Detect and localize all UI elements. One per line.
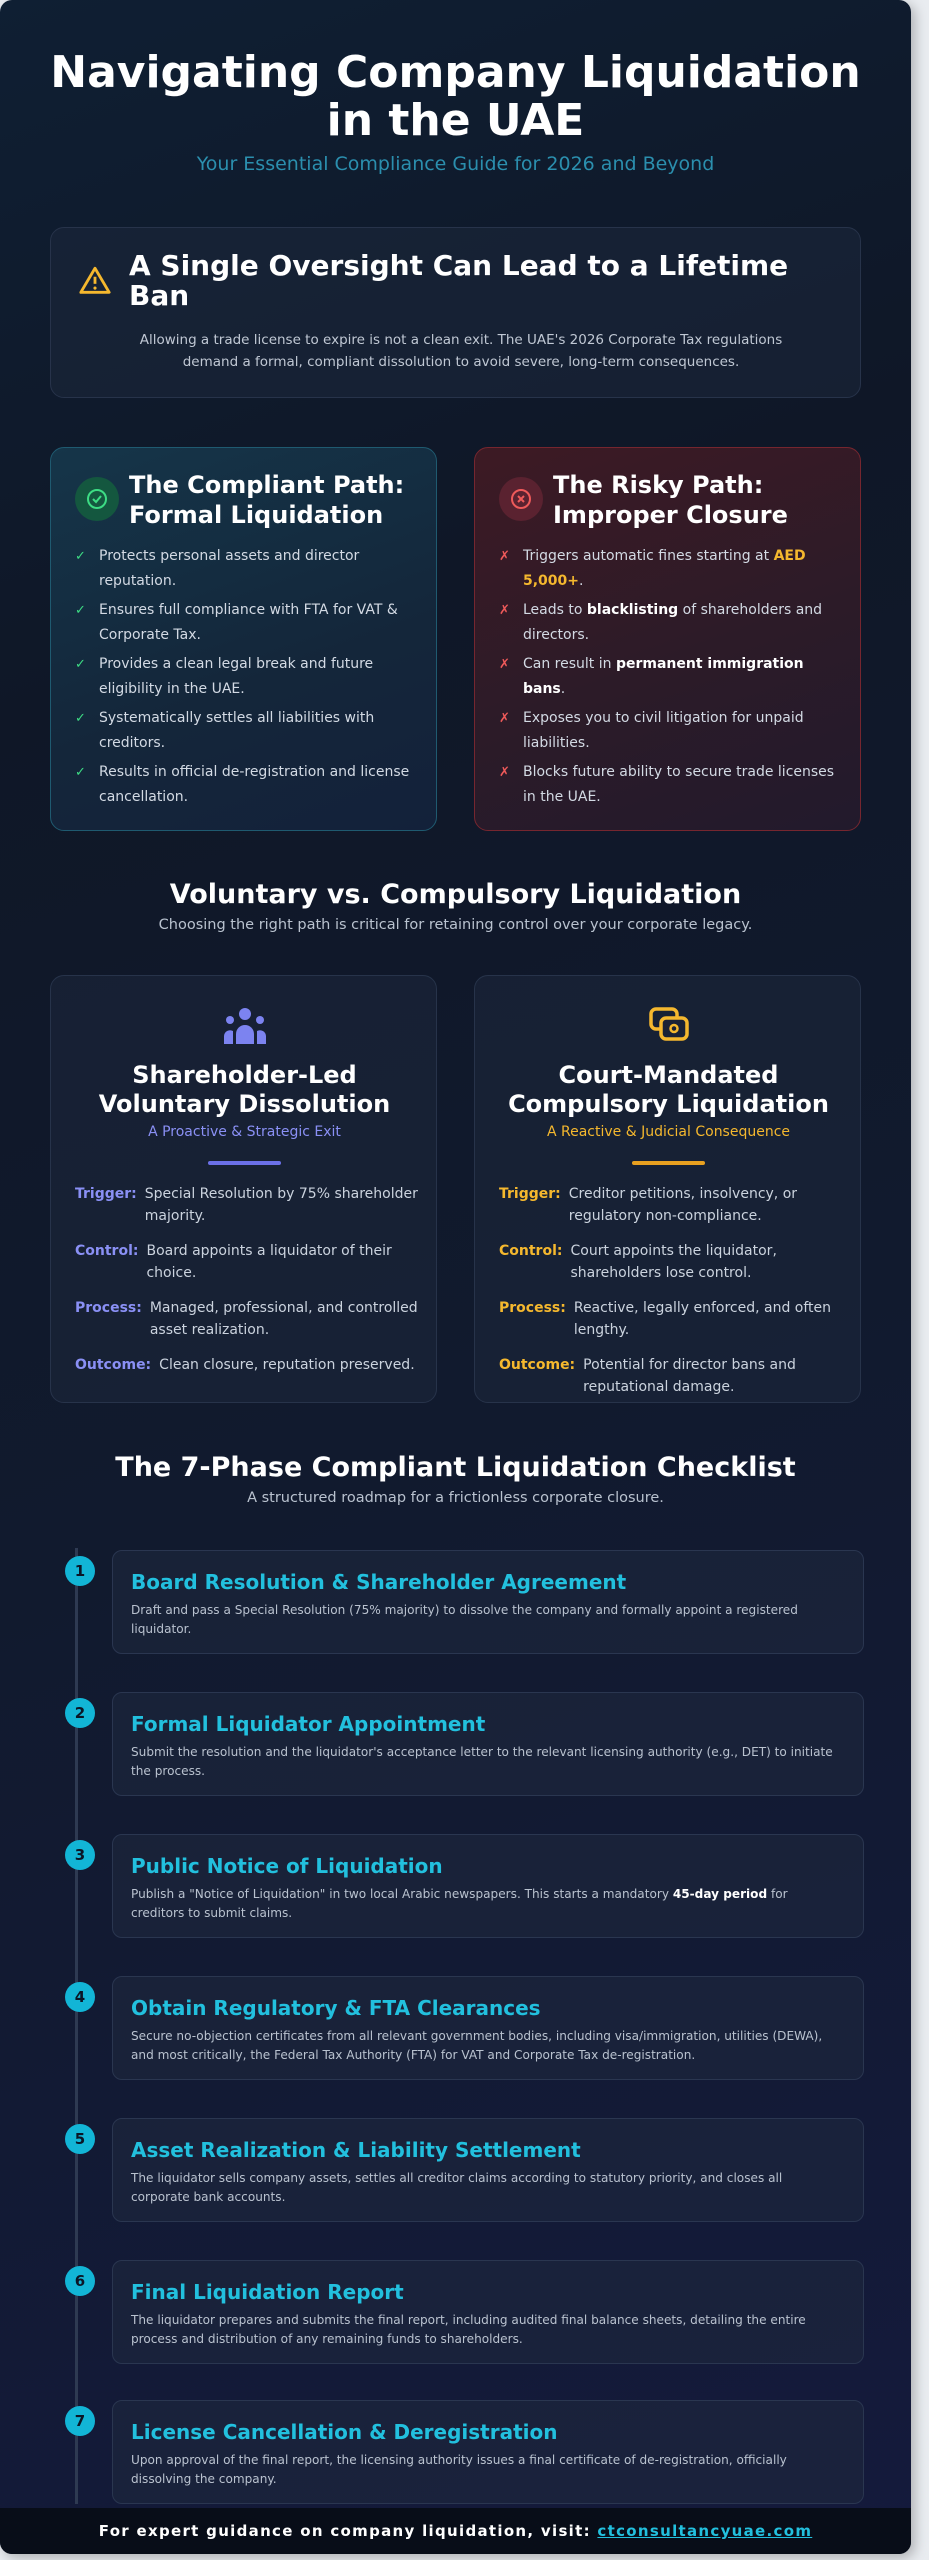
details: Control:: [75, 1243, 138, 1259]
details: [499, 1186, 831, 1395]
list: Exposes you to civil litigation for unpaid liabilities.: [523, 710, 804, 751]
panel: risky path: [474, 447, 861, 831]
details: [75, 1186, 418, 1373]
icon: court/money: [649, 1007, 689, 1041]
heading: Improper Closure: [553, 501, 788, 529]
step 7: 7: [75, 2412, 85, 2430]
heading: Compulsory Liquidation: [508, 1090, 829, 1118]
panel: voluntary: [50, 975, 437, 1403]
step 5: [65, 2124, 95, 2154]
step card 3: Publish a "Notice of Liquidation" in two local Arabic newspapers. This starts a mandatory 45-day period for creditors to submit claims.: [131, 1887, 788, 1920]
list: ✗: [499, 549, 510, 564]
step card 7: License Cancellation & Deregistration: [131, 2420, 557, 2444]
section subtitle: A structured roadmap for a frictionless corporate closure.: [247, 1490, 664, 1506]
heading: Formal Liquidation: [129, 501, 383, 529]
step card 4: [112, 1976, 864, 2080]
details: Special Resolution by 75% shareholder majority.: [145, 1186, 418, 1224]
details: Court appoints the liquidator, shareholders lose control.: [570, 1243, 777, 1281]
step 6: 6: [75, 2272, 85, 2290]
icon: check circle: [75, 477, 119, 521]
details: Control:: [499, 1243, 562, 1259]
subtitle: Your Essential Compliance Guide for 2026 and Beyond: [197, 153, 714, 175]
details: Reactive, legally enforced, and often lengthy.: [574, 1300, 831, 1338]
list: Ensures full compliance with FTA for VAT & Corporate Tax.: [99, 602, 398, 643]
list: ✗: [499, 657, 510, 672]
step card 1: Draft and pass a Special Resolution (75% majority) to dissolve the company and formally appoint a registered liquidator.: [131, 1603, 798, 1636]
icon: x circle: [499, 477, 543, 521]
warning heading: A Single Oversight Can Lead to a Lifetime Ban: [129, 249, 788, 312]
icon: warning triangle: [79, 266, 111, 294]
step 4: 4: [75, 1988, 85, 2006]
heading: Court-Mandated: [559, 1061, 778, 1089]
list: ✓: [75, 711, 86, 726]
accent bar: [632, 1161, 705, 1165]
list: Can result in permanent immigration bans.: [523, 656, 804, 697]
details: Process:: [499, 1300, 566, 1316]
step card 2: Submit the resolution and the liquidator's acceptance letter to the relevant licensing authority (e.g., DET) to initiate the process.: [131, 1745, 833, 1778]
list: Protects personal assets and director reputation.: [99, 548, 359, 589]
footer: For expert guidance on company liquidation, visit: ctconsultancyuae.com: [99, 2522, 812, 2540]
details: Trigger:: [75, 1186, 137, 1202]
heading: [553, 471, 788, 529]
title: Navigating Company Liquidation: [50, 47, 861, 98]
details: Board appoints a liquidator of their choice.: [146, 1243, 392, 1281]
step card 5: [112, 2118, 864, 2222]
details: Outcome:: [499, 1357, 575, 1373]
step card 4: Obtain Regulatory & FTA Clearances: [131, 1996, 541, 2020]
heading: [98, 1061, 390, 1118]
step card 6: [112, 2260, 864, 2364]
heading: [129, 471, 404, 529]
step card 6: Final Liquidation Report: [131, 2280, 404, 2304]
step card 4: Secure no-objection certificates from all relevant government bodies, including visa/immigration, utilities (DEWA), and most critically, the Federal Tax Authority (FTA) for VAT and Corporate Tax de-registration.: [131, 2029, 822, 2062]
list: Systematically settles all liabilities with creditors.: [99, 710, 374, 751]
list: [499, 548, 834, 805]
details: Creditor petitions, insolvency, or regulatory non-compliance.: [569, 1186, 797, 1224]
tagline: A Reactive & Judicial Consequence: [547, 1124, 790, 1140]
step 5: 5: [75, 2130, 85, 2148]
details: Potential for director bans and reputational damage.: [583, 1357, 796, 1395]
step card 5: The liquidator sells company assets, settles all creditor claims according to statutory priority, and closes all corporate bank accounts.: [131, 2171, 782, 2204]
section heading: checklist: The 7-Phase Compliant Liquidation Checklist: [115, 1452, 796, 1483]
section subtitle: Choosing the right path is critical for retaining control over your corporate legacy.: [159, 917, 752, 933]
panel: compulsory: [474, 975, 861, 1403]
section heading: voluntary vs compulsory: Voluntary vs. Compulsory Liquidation: [170, 879, 741, 910]
details: Managed, professional, and controlled asset realization.: [150, 1300, 418, 1338]
list: ✓: [75, 657, 86, 672]
icon: people: [224, 1008, 266, 1044]
warning panel: [50, 227, 861, 398]
step 1: 1: [75, 1562, 85, 1580]
panel: compliant path: [50, 447, 437, 831]
list: Blocks future ability to secure trade licenses in the UAE.: [523, 764, 834, 805]
heading: Voluntary Dissolution: [99, 1090, 390, 1118]
step card 6: The liquidator prepares and submits the final report, including audited final balance sheets, detailing the entire process and distribution of any remaining funds to shareholders.: [131, 2313, 806, 2346]
list: ✗: [499, 603, 510, 618]
step card 7: Upon approval of the final report, the licensing authority issues a final certificate of de-registration, officially dissolving the company.: [131, 2453, 787, 2486]
step card 3: Public Notice of Liquidation: [131, 1854, 443, 1878]
step card 2: [112, 1692, 864, 1796]
heading: The Risky Path:: [553, 471, 763, 499]
heading: Shareholder-Led: [132, 1061, 357, 1089]
step card 2: Formal Liquidator Appointment: [131, 1712, 485, 1736]
title: [50, 47, 861, 146]
step card 3: [112, 1834, 864, 1938]
heading: The Compliant Path:: [129, 471, 404, 499]
step 3: [65, 1840, 95, 1870]
step card 1: [112, 1550, 864, 1654]
step 2: 2: [75, 1704, 85, 1722]
list: ✗: [499, 765, 510, 780]
accent bar: [208, 1161, 281, 1165]
list: Triggers automatic fines starting at AED 5,000+.: [523, 548, 806, 589]
step 6: [65, 2266, 95, 2296]
details: Clean closure, reputation preserved.: [159, 1357, 415, 1373]
step 1: [65, 1556, 95, 1586]
list: ✓: [75, 549, 86, 564]
step 7: [65, 2406, 95, 2436]
step card 5: Asset Realization & Liability Settlement: [131, 2138, 581, 2162]
tagline: A Proactive & Strategic Exit: [148, 1124, 341, 1140]
step card 1: Board Resolution & Shareholder Agreement: [131, 1570, 626, 1594]
title: in the UAE: [327, 95, 584, 146]
step 4: [65, 1982, 95, 2012]
step 2: [65, 1698, 95, 1728]
details: Trigger:: [499, 1186, 561, 1202]
details: Process:: [75, 1300, 142, 1316]
list: Leads to blacklisting of shareholders and directors.: [523, 602, 822, 643]
step 3: 3: [75, 1846, 85, 1864]
details: Outcome:: [75, 1357, 151, 1373]
warning text: Allowing a trade license to expire is not a clean exit. The UAE's 2026 Corporate Tax regulations demand a formal, compliant dissolution to avoid severe, long-term consequences.: [140, 332, 782, 370]
step card 7: [112, 2400, 864, 2504]
list: ✓: [75, 603, 86, 618]
footer: [0, 2508, 911, 2554]
list: Results in official de-registration and license cancellation.: [99, 764, 409, 805]
list: ✗: [499, 711, 510, 726]
list: Provides a clean legal break and future eligibility in the UAE.: [99, 656, 373, 697]
list: [75, 548, 409, 805]
heading: [508, 1061, 829, 1118]
list: ✓: [75, 765, 86, 780]
